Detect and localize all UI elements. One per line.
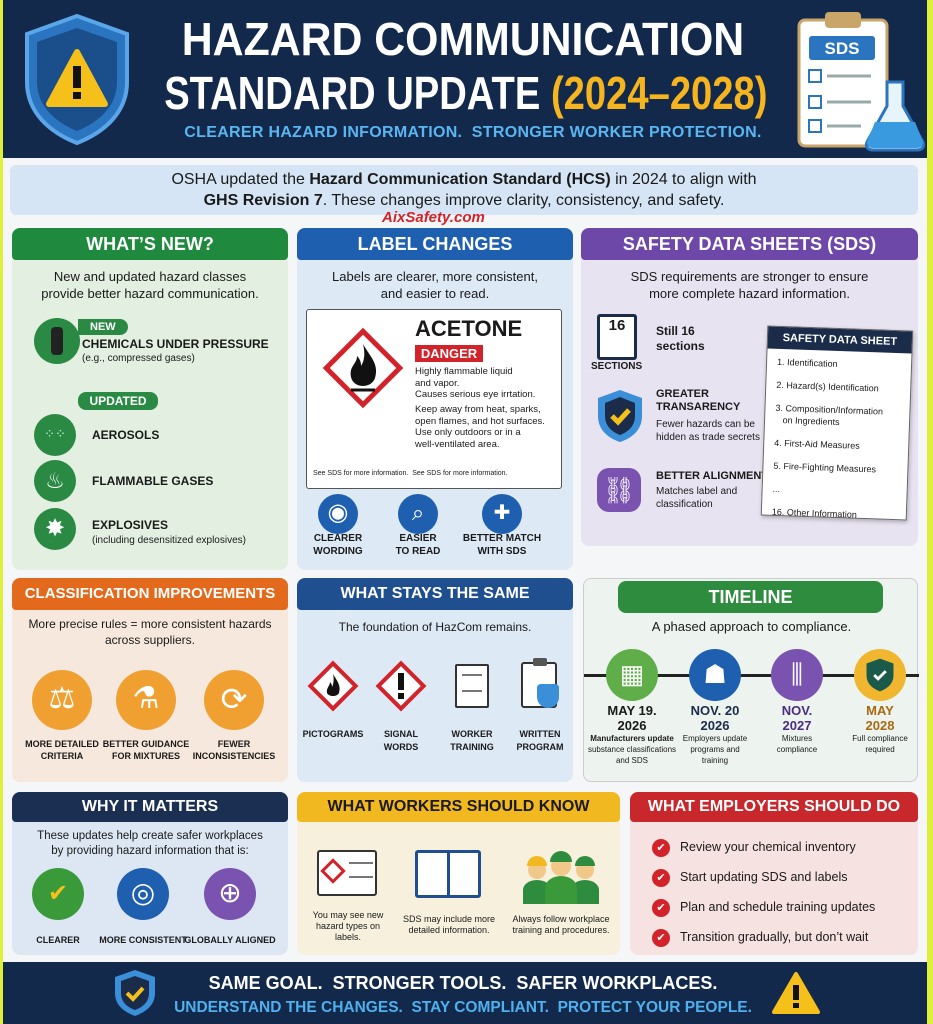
intro text box: OSHA updated the Hazard Communication Standard (HCS) in 2024 to align with bbox=[171, 171, 757, 188]
icon: arrows cycle: ⟳ bbox=[221, 681, 247, 717]
panel: safety data sheets: SAFETY DATA SHEETS (SDS) bbox=[623, 234, 876, 254]
icon: puzzle bbox=[482, 494, 522, 534]
icon: shield check bbox=[598, 390, 642, 442]
panel: timeline: MAY bbox=[866, 703, 894, 718]
sds document: SAFETY DATA SHEET bbox=[782, 332, 897, 348]
panel: what employers should do: WHAT EMPLOYERS SHOULD DO bbox=[648, 798, 900, 815]
icon: magnifier: ⌕ bbox=[412, 500, 424, 525]
title: HAZARD COMMUNICATION bbox=[182, 13, 744, 65]
panel: why it matters: by providing hazard information that is: bbox=[51, 845, 249, 857]
icon: puzzle: ✚ bbox=[494, 502, 510, 524]
panel: what stays the same: WHAT STAYS THE SAME bbox=[340, 585, 530, 602]
panel: what's new: provide better hazard communication. bbox=[41, 286, 259, 301]
icon: chain link: ⛓ bbox=[602, 475, 636, 505]
icon: flame bbox=[34, 460, 76, 502]
acetone label: well-ventilated area. bbox=[415, 438, 500, 450]
icon: aerosols: ⁘⁘ bbox=[44, 426, 66, 441]
panel: what's new: (including desensitized explosives) bbox=[92, 535, 246, 546]
sds document: ... bbox=[773, 483, 780, 494]
panel: what's new: AEROSOLS bbox=[92, 428, 159, 442]
panel: what workers should know: WHAT WORKERS SHOULD KNOW bbox=[328, 798, 589, 815]
icon: warning triangle bbox=[772, 972, 820, 1014]
panel: label changes bbox=[297, 228, 573, 570]
checklist: ✔ bbox=[656, 872, 666, 884]
footer banner: UNDERSTAND THE CHANGES. STAY COMPLIANT. PROTECT YOUR PEOPLE. bbox=[174, 999, 752, 1016]
panel: safety data sheets: GREATER bbox=[656, 388, 709, 400]
checklist: Start updating SDS and labels bbox=[680, 870, 847, 884]
panel: safety data sheets: more complete hazard information. bbox=[649, 286, 850, 301]
milestone 1: ▦ bbox=[620, 659, 644, 689]
panel: timeline: NOV. 20 bbox=[691, 703, 739, 718]
icon: shield check bbox=[115, 970, 155, 1016]
panel: classification improvements: MORE DETAILED bbox=[25, 739, 99, 749]
icon: eye: ◉ bbox=[328, 499, 348, 526]
sds document: 16. Other Information bbox=[772, 506, 857, 519]
panel: what workers should know: SDS may include more bbox=[403, 914, 495, 924]
icon: warning shield bbox=[25, 14, 129, 146]
panel: what stays the same: WORDS bbox=[384, 742, 418, 752]
panel: label changes: LABEL CHANGES bbox=[358, 234, 512, 254]
panel: what's new: New and updated hazard classes bbox=[54, 269, 246, 284]
panel: safety data sheets bbox=[581, 228, 918, 546]
subtitle: CLEARER HAZARD INFORMATION. STRONGER WORKER PROTECTION. bbox=[184, 124, 762, 141]
footer banner bbox=[3, 962, 927, 1024]
panel: timeline: NOV. bbox=[782, 703, 812, 718]
checklist: ✔ bbox=[656, 932, 666, 944]
panel: safety data sheets: sections bbox=[656, 339, 705, 353]
icon: workers bbox=[523, 851, 599, 904]
panel: safety data sheets: SDS requirements are stronger to ensure bbox=[631, 269, 868, 284]
sds document: 2. Hazard(s) Identification bbox=[776, 380, 879, 393]
panel: timeline: Mixtures bbox=[782, 734, 812, 743]
panel: classification improvements: CRITERIA bbox=[41, 751, 83, 761]
icon: explosion: ✸ bbox=[45, 515, 65, 542]
panel: label changes: WORDING bbox=[313, 546, 363, 557]
panel: what stays the same bbox=[297, 578, 573, 782]
acetone label: and vapor. bbox=[415, 378, 459, 388]
panel: classification improvements bbox=[12, 578, 288, 782]
panel: classification improvements: FOR MIXTURES bbox=[112, 751, 180, 761]
icon: training document bbox=[455, 664, 489, 708]
panel: why it matters: WHY IT MATTERS bbox=[82, 798, 218, 815]
panel: safety data sheets: Still 16 bbox=[656, 324, 695, 338]
checklist: ✔ bbox=[656, 902, 666, 914]
milestone 2 bbox=[689, 649, 741, 701]
new badge bbox=[78, 319, 128, 335]
icon: signal word bbox=[376, 660, 426, 712]
acetone label: Use only outdoors or in a bbox=[415, 427, 521, 438]
panel: timeline: programs and bbox=[690, 745, 740, 754]
panel: classification improvements: INCONSISTENCIES bbox=[193, 751, 275, 761]
milestone 3 bbox=[771, 649, 823, 701]
icon: target bbox=[117, 868, 169, 920]
watermark: AixSafety.com bbox=[382, 209, 485, 226]
panel: timeline: substance classifications bbox=[588, 745, 676, 754]
acetone label: Highly flammable liquid bbox=[415, 366, 513, 377]
sds document bbox=[761, 326, 913, 520]
panel: label changes: BETTER MATCH bbox=[463, 533, 541, 544]
icon: globe bbox=[204, 868, 256, 920]
acetone label: DANGER bbox=[421, 346, 477, 361]
timeline line bbox=[584, 674, 919, 677]
panel: what workers should know: You may see new bbox=[313, 910, 383, 920]
panel: what workers should know: labels. bbox=[335, 932, 361, 942]
icon: target: ◎ bbox=[131, 877, 155, 908]
checklist bbox=[652, 839, 875, 947]
icon: flammable pictogram bbox=[322, 328, 404, 408]
panel: timeline: A phased approach to compliance. bbox=[652, 619, 851, 634]
panel: label changes: and easier to read. bbox=[381, 286, 489, 301]
new badge: NEW bbox=[90, 321, 116, 333]
panel: what's new: CHEMICALS UNDER PRESSURE bbox=[82, 337, 269, 351]
icon: scale bbox=[32, 670, 92, 730]
panel: what's new: WHAT’S NEW? bbox=[86, 234, 214, 254]
panel: why it matters: These updates help create safer workplaces bbox=[37, 830, 263, 842]
header banner bbox=[3, 0, 927, 158]
panel: label changes: Labels are clearer, more consistent, bbox=[332, 269, 538, 284]
panel: why it matters: CLEARER bbox=[36, 935, 80, 945]
icon: flask: ⚗ bbox=[133, 682, 159, 715]
icon: SDS clipboard with flask bbox=[798, 12, 926, 152]
panel: classification improvements: FEWER bbox=[218, 739, 250, 749]
icon: 16 sections: 16 bbox=[609, 317, 625, 334]
acetone label: Keep away from heat, sparks, bbox=[415, 404, 541, 415]
panel: classification improvements: across suppliers. bbox=[105, 633, 195, 647]
icon: SDS clipboard with flask: SDS bbox=[825, 39, 859, 58]
acetone label: See SDS for more information. See SDS for more information. bbox=[313, 470, 508, 477]
icon: pictogram bbox=[308, 660, 358, 712]
icon: written program bbox=[521, 662, 557, 708]
icon: label sheet bbox=[317, 850, 377, 896]
panel: timeline: required bbox=[865, 745, 895, 754]
panel: classification improvements: BETTER GUIDANCE bbox=[103, 739, 189, 749]
panel: what workers should know: detailed information. bbox=[408, 925, 490, 935]
checklist: Review your chemical inventory bbox=[680, 840, 856, 854]
milestone 2: ☗ bbox=[703, 659, 727, 689]
panel: timeline: compliance bbox=[777, 745, 817, 754]
panel: what stays the same: WORKER bbox=[452, 729, 492, 739]
panel: safety data sheets: Fewer hazards can be bbox=[656, 419, 755, 430]
sds document: on Ingredients bbox=[782, 415, 840, 427]
panel: timeline: 2026 bbox=[701, 718, 729, 733]
milestone 4 bbox=[854, 649, 906, 701]
panel: safety data sheets: hidden as trade secrets bbox=[656, 432, 760, 443]
icon: aerosols bbox=[34, 414, 76, 456]
intro text box bbox=[10, 165, 918, 215]
intro text box: GHS Revision 7. These changes improve clarity, consistency, and safety. bbox=[204, 192, 724, 209]
panel: timeline: Full compliance bbox=[852, 734, 908, 743]
milestone 1 bbox=[606, 649, 658, 701]
panel: timeline bbox=[583, 578, 918, 782]
panel: timeline: Employers update bbox=[683, 734, 747, 743]
panel: what workers should know: hazard types on bbox=[316, 921, 380, 931]
panel: timeline: 2026 bbox=[618, 718, 646, 733]
panel: label changes: CLEARER bbox=[314, 533, 362, 544]
panel: label changes: WITH SDS bbox=[478, 546, 526, 557]
panel: timeline: training bbox=[702, 756, 728, 765]
sds document: 1. Identification bbox=[777, 357, 838, 369]
panel: what workers should know: training and procedures. bbox=[512, 925, 610, 935]
panel: what's new bbox=[12, 228, 288, 570]
panel: why it matters bbox=[12, 792, 288, 955]
panel: what's new: EXPLOSIVES bbox=[92, 518, 168, 532]
panel: safety data sheets: SECTIONS bbox=[591, 361, 642, 372]
panel: timeline: and SDS bbox=[616, 756, 648, 765]
icon: explosion bbox=[34, 508, 76, 550]
panel: safety data sheets: classification bbox=[656, 499, 713, 510]
panel: what stays the same: PICTOGRAMS bbox=[303, 729, 363, 739]
icon: globe: ⊕ bbox=[218, 877, 242, 908]
panel: why it matters: MORE CONSISTENT bbox=[99, 935, 187, 945]
icon: chain link bbox=[597, 468, 641, 512]
acetone label: ACETONE bbox=[415, 316, 522, 341]
title: STANDARD UPDATE (2024–2028) bbox=[164, 67, 767, 119]
panel: what stays the same: SIGNAL bbox=[384, 729, 418, 739]
panel: safety data sheets: TRANSARENCY bbox=[656, 401, 740, 413]
panel: label changes: TO READ bbox=[396, 546, 440, 557]
panel: why it matters: GLOBALLY ALIGNED bbox=[184, 935, 276, 945]
checklist: Transition gradually, but don’t wait bbox=[680, 930, 868, 944]
icon: 16 sections bbox=[597, 314, 637, 360]
title bbox=[164, 13, 767, 119]
panel: timeline: 2027 bbox=[783, 718, 811, 733]
panel: what stays the same: WRITTEN bbox=[520, 729, 560, 739]
checklist: Plan and schedule training updates bbox=[680, 900, 875, 914]
updated badge bbox=[78, 392, 158, 410]
updated badge: UPDATED bbox=[89, 394, 147, 408]
panel: what's new: FLAMMABLE GASES bbox=[92, 474, 213, 488]
panel: what workers should know: Always follow workplace bbox=[512, 914, 610, 924]
sds document: 3. Composition/Information bbox=[775, 403, 883, 417]
icon: open book bbox=[415, 850, 481, 898]
icon: eye bbox=[318, 494, 358, 534]
panel: classification improvements: More precise rules = more consistent hazards bbox=[28, 617, 272, 631]
acetone label: open flames, and hot surfaces. bbox=[415, 416, 545, 426]
acetone label bbox=[306, 309, 562, 489]
panel: what's new: (e.g., compressed gases) bbox=[82, 353, 195, 364]
icon: magnifier bbox=[398, 494, 438, 534]
checklist: ✔ bbox=[656, 842, 666, 854]
icon: arrows cycle bbox=[204, 670, 264, 730]
panel: timeline: Manufacturers update bbox=[590, 734, 674, 743]
panel: safety data sheets: Matches label and bbox=[656, 486, 737, 497]
panel: what stays the same: The foundation of HazCom remains. bbox=[339, 620, 531, 634]
icon: flask bbox=[116, 670, 176, 730]
sds document: 5. Fire-Fighting Measures bbox=[773, 460, 876, 474]
panel: timeline: TIMELINE bbox=[708, 587, 792, 607]
panel: timeline: 2028 bbox=[866, 718, 894, 733]
acetone label: Causes serious eye irrtation. bbox=[415, 389, 535, 400]
sds document: 4. First-Aid Measures bbox=[774, 437, 860, 450]
icon: clearer shield: ✔ bbox=[48, 880, 68, 907]
panel: label changes: EASIER bbox=[399, 533, 437, 544]
panel: safety data sheets: BETTER ALIGNMENT bbox=[656, 470, 768, 482]
panel: what stays the same: TRAINING bbox=[450, 742, 494, 752]
icon: clearer shield bbox=[32, 868, 84, 920]
milestone 3: ⫼ bbox=[791, 659, 803, 689]
icon: flame: ♨ bbox=[45, 468, 65, 493]
panel: what stays the same: PROGRAM bbox=[516, 742, 564, 752]
panel: what employers should do bbox=[630, 792, 918, 955]
panel: what workers should know bbox=[297, 792, 620, 955]
icon: gas cylinder bbox=[34, 318, 80, 364]
footer text: SAME GOAL. STRONGER TOOLS. SAFER WORKPLACES. bbox=[209, 973, 717, 993]
icon: scale: ⚖ bbox=[49, 682, 75, 715]
panel: timeline: MAY 19. bbox=[607, 703, 657, 718]
panel: classification improvements: CLASSIFICATION IMPROVEMENTS bbox=[25, 585, 275, 602]
